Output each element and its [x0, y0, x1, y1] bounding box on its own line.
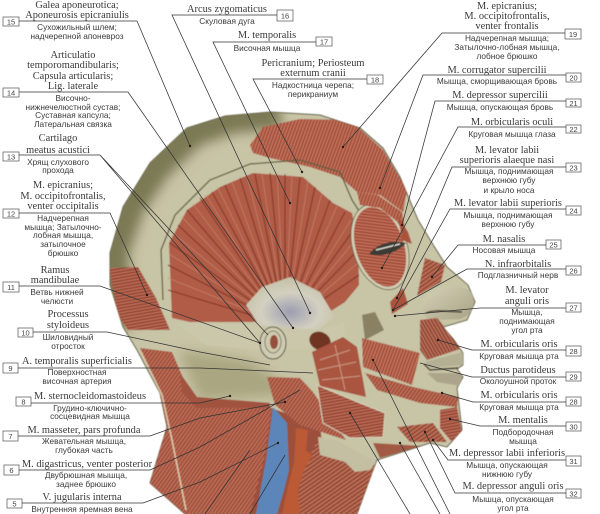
upper lip	[425, 352, 463, 368]
label 13: cartilage of the auditory meatus: 13	[7, 152, 15, 162]
galea shading	[112, 112, 280, 330]
label 26: infraorbital nerve: N. infraorbitalis	[485, 259, 551, 270]
label 20: corrugator: M. corrugator supercilii	[448, 65, 547, 76]
label 18: pericranium	[253, 58, 383, 173]
label 5: internal jugular vein: Внутренняя яремная вена	[31, 504, 133, 514]
label 17: temporalis: Височная мышца	[234, 43, 301, 53]
label 16: zygomatic arch: Скуловая дуга	[199, 16, 255, 26]
label 23: levator labii superioris alaeque nasi: Мышца, поднимающая	[465, 166, 553, 176]
label 24: levator labii superioris	[392, 198, 581, 311]
cavity under cheek	[362, 312, 384, 340]
label 24: levator labii superioris: 24	[569, 206, 578, 216]
label 26: infraorbital nerve: Подглазничный нерв	[478, 270, 559, 280]
label 20: corrugator: 20	[569, 74, 578, 82]
label 11: ramus mandibulae: Ветвь нижней	[30, 287, 84, 297]
label 22: orbicularis oculi: M. orbicularis oculi	[471, 117, 553, 128]
label 13: cartilage of the auditory meatus: Хрящ слухового	[27, 157, 89, 167]
neck muscles left	[140, 348, 272, 514]
label 27: levator anguli oris	[394, 285, 581, 335]
label 7: deep masseter: глубокая часть	[55, 445, 113, 455]
depressor supercilii	[398, 216, 412, 244]
label 11: ramus mandibulae: Ramus	[41, 265, 69, 276]
label 10: styloid process: отросток	[51, 341, 85, 351]
label 31: depressor labii inferioris	[432, 439, 581, 479]
label 14: temporomandibular joint: Височно-	[55, 93, 91, 103]
superficial masseter	[317, 385, 385, 438]
label 21: depressor supercilii: 21	[569, 99, 578, 108]
label 27: levator anguli oris: поднимающая	[499, 316, 555, 326]
label 31: depressor labii inferioris: Мышца, опускающая	[466, 460, 548, 470]
label 25: nasalis: M. nasalis	[483, 234, 525, 245]
label 10: styloid process	[18, 309, 270, 365]
label 11: ramus mandibulae	[3, 265, 260, 343]
label 9: superficial temporal artery: 9	[8, 364, 13, 373]
label 6: digastric posterior belly	[4, 390, 300, 489]
label 28: orbicularis oris lower	[441, 390, 581, 412]
label 9: superficial temporal artery	[3, 356, 313, 386]
label 12: occipital belly: затылочное	[40, 239, 86, 249]
label 26: infraorbital nerve	[393, 259, 581, 310]
label 14: temporomandibular joint	[3, 50, 294, 329]
neck muscles right	[295, 440, 376, 514]
label 7: deep masseter: M. masseter, pars profunda	[28, 425, 141, 436]
mouth	[424, 364, 458, 370]
label 8: sternocleidomastoid	[16, 391, 231, 421]
label 9: superficial temporal artery: Поверхностная	[47, 367, 107, 377]
label 17: temporalis	[213, 30, 332, 204]
label 19: frontal belly	[342, 1, 581, 148]
label 15: galea aponeurotica: Galea aponeurotica;	[35, 0, 119, 11]
label 28: orbicularis oris lower: M. orbicularis oris	[480, 390, 558, 401]
label 23: levator labii superioris alaeque nasi: верхнюю губу	[483, 175, 536, 185]
label 21: depressor supercilii: Мышца, опускающая бровь	[447, 102, 553, 112]
label 32: depressor anguli oris: Мышца, опускающая	[472, 494, 554, 504]
label 31: depressor labii inferioris: M. depressor labii inferioris	[449, 448, 565, 459]
occipital belly	[109, 267, 170, 330]
label 16: zygomatic arch	[172, 4, 311, 314]
label 13: cartilage of the auditory meatus: meatus acustici	[26, 145, 90, 156]
label 32: depressor anguli oris: угол рта	[497, 503, 529, 513]
label 18: pericranium: Pericranium; Periosteum	[261, 58, 365, 69]
label 9: superficial temporal artery: A. temporalis superficialis	[22, 356, 132, 367]
label 17: temporalis: M. temporalis	[238, 30, 296, 41]
label 10: styloid process: Шиловидный	[43, 332, 94, 342]
label 22: orbicularis oculi: 22	[569, 125, 578, 134]
label 25: nasalis: Носовая мышца	[473, 245, 536, 255]
label 31: depressor labii inferioris: нижнюю губу	[482, 469, 533, 479]
orbicularis oculi	[353, 206, 407, 288]
label 11: ramus mandibulae: 11	[7, 283, 15, 292]
label 19: frontal belly: 19	[569, 30, 577, 39]
label 32: depressor anguli oris: M. depressor anguli oris	[462, 481, 564, 492]
temporal tendon	[246, 277, 335, 335]
label 19: frontal belly: venter frontalis	[475, 21, 539, 32]
mastoid shading	[178, 350, 300, 400]
label 20: corrugator	[379, 65, 581, 189]
frontal belly	[250, 119, 407, 212]
label 7: deep masseter: 7	[8, 432, 13, 441]
label 11: ramus mandibulae: челюсти	[41, 296, 74, 306]
levator labii	[390, 288, 408, 314]
ear cartilage	[260, 327, 286, 359]
label 25: nasalis: 25	[549, 240, 558, 250]
label 6: digastric posterior belly: M. digastricus, venter posterior	[22, 459, 153, 470]
label 14: temporomandibular joint: Lig. laterale	[48, 81, 98, 92]
skull and face base	[110, 112, 475, 514]
label 21: depressor supercilii: M. depressor supercilii	[452, 90, 548, 101]
label 12: occipital belly: M. epicranius;	[33, 180, 93, 191]
label 9: superficial temporal artery: височная артерия	[42, 376, 112, 386]
label 23: levator labii superioris alaeque nasi: M. levator labii	[475, 145, 539, 156]
label 6: digastric posterior belly: Двубрюшная мышца,	[45, 470, 127, 480]
label 23: levator labii superioris alaeque nasi: и крыло носа	[484, 185, 535, 195]
label 13: cartilage of the auditory meatus: прохода	[42, 165, 74, 175]
label 23: levator labii superioris alaeque nasi: superioris alaeque nasi	[460, 155, 554, 166]
label 12: occipital belly: M. occipitofrontalis,	[20, 191, 106, 202]
label 19: frontal belly: лобное брюшко	[476, 51, 538, 61]
neck backdrop	[250, 408, 322, 514]
label 22: orbicularis oculi: Круговая мышца глаза	[468, 129, 556, 139]
label 22: orbicularis oculi	[381, 117, 581, 269]
label 29: parotid duct	[420, 363, 581, 386]
label 18: pericranium: 18	[371, 76, 379, 84]
leader lines running off the bottom edge	[205, 359, 450, 514]
label 20: corrugator: Мышца, сморщивающая бровь	[437, 76, 557, 86]
orbit rim	[350, 205, 410, 291]
label 19: frontal belly: M. epicranius;	[477, 1, 537, 12]
orbicularis oris upper	[420, 318, 463, 360]
label 8: sternocleidomastoid: M. sternocleidomastoideus	[34, 391, 146, 402]
label 24: levator labii superioris: M. levator labii superioris	[454, 198, 562, 209]
label 25: nasalis	[431, 234, 561, 278]
label 8: sternocleidomastoid: Грудино-ключично-	[53, 403, 127, 413]
label 14: temporomandibular joint: temporomandibularis;	[27, 60, 119, 71]
label 32: depressor anguli oris: 32	[569, 490, 578, 498]
parotid gland	[312, 337, 366, 397]
label 10: styloid process: styloideus	[47, 320, 89, 331]
label 19: frontal belly: M. occipitofrontalis,	[464, 11, 550, 22]
zygomatic arch	[260, 325, 316, 334]
cheek muscles	[362, 338, 420, 385]
label 23: levator labii superioris alaeque nasi	[396, 145, 581, 299]
depressor anguli oris	[397, 423, 447, 442]
label 6: digastric posterior belly: заднее брюшко	[56, 479, 116, 489]
label 27: levator anguli oris: anguli oris	[505, 296, 549, 307]
internal jugular vein	[256, 407, 289, 514]
label 27: levator anguli oris: Мышца,	[511, 307, 543, 317]
label 12: occipital belly	[3, 180, 148, 296]
label 18: pericranium: Надкостница черепа;	[272, 80, 354, 90]
label 14: temporomandibular joint: Суставная капсула;	[35, 110, 111, 120]
label 15: galea aponeurotica: Aponeurosis epicraniulis	[25, 10, 129, 21]
neck tendon strip	[141, 352, 186, 510]
label 30: mentalis: 30	[569, 422, 578, 432]
label 7: deep masseter: Жевательная мышца,	[42, 436, 126, 446]
label 29: parotid duct: 29	[569, 372, 578, 382]
label 13: cartilage of the auditory meatus: Cartilago	[39, 133, 77, 144]
label 7: deep masseter	[3, 401, 286, 455]
label 23: levator labii superioris alaeque nasi: 23	[569, 164, 578, 172]
label 18: pericranium: externum cranii	[280, 68, 346, 79]
label 10: styloid process: 10	[21, 328, 30, 338]
label 28: orbicularis oris upper: Круговая мышца рта	[479, 351, 559, 361]
label 14: temporomandibular joint: 14	[7, 88, 15, 98]
eye	[369, 242, 406, 255]
label 30: mentalis: мышца	[509, 436, 537, 446]
label 30: mentalis: M. mentalis	[498, 415, 548, 426]
temporalis	[169, 173, 359, 322]
nasalis	[417, 258, 445, 296]
label 28: orbicularis oris upper: 28	[569, 347, 578, 356]
label 30: mentalis	[449, 415, 581, 446]
label 12: occipital belly: 12	[7, 210, 15, 218]
corrugator	[357, 192, 405, 228]
label 21: depressor supercilii	[401, 90, 581, 226]
label 24: levator labii superioris: Мышца, поднимающая	[464, 210, 552, 220]
label 13: cartilage of the auditory meatus	[3, 133, 268, 344]
label 12: occipital belly: Надчерепная	[37, 213, 89, 223]
label 27: levator anguli oris: 27	[569, 304, 578, 312]
label 12: occipital belly: брюшко	[48, 248, 79, 258]
submental muscle	[372, 442, 420, 458]
label 27: levator anguli oris: угол рта	[511, 325, 543, 335]
label 14: temporomandibular joint: Capsula articularis;	[33, 71, 113, 82]
label 19: frontal belly: Затылочно-лобная мышца,	[454, 42, 560, 52]
label 12: occipital belly: мышца; Затылочно-	[24, 222, 102, 232]
label 28: orbicularis oris upper	[437, 339, 581, 361]
label 10: styloid process: Processus	[48, 309, 88, 320]
label 18: pericranium: перикраниум	[288, 89, 338, 99]
label 31: depressor labii inferioris: 31	[569, 457, 578, 466]
label 15: galea aponeurotica: Сухожильный шлем;	[37, 22, 117, 32]
label 19: frontal belly: Надчерепная мышца;	[465, 33, 549, 43]
label 12: occipital belly: venter occipitalis	[27, 201, 99, 212]
label 5: internal jugular vein	[7, 442, 279, 514]
label 16: zygomatic arch: 16	[281, 12, 289, 20]
label 5: internal jugular vein: 5	[12, 500, 17, 508]
label 27: levator anguli oris: M. levator	[505, 285, 549, 296]
label 30: mentalis: Подбородочная	[493, 427, 553, 437]
label 8: sternocleidomastoid: 8	[21, 398, 26, 406]
label 32: depressor anguli oris	[424, 431, 581, 513]
label 14: temporomandibular joint: нижнечелюстной сустав;	[26, 102, 120, 112]
label 29: parotid duct: Околоушной проток	[480, 376, 557, 386]
deep masseter	[267, 377, 346, 440]
label 29: parotid duct: Ductus parotideus	[480, 365, 556, 376]
label 15: galea aponeurotica: 15	[7, 18, 15, 26]
head and neck illustration	[109, 112, 475, 514]
nose	[426, 290, 474, 320]
label 15: galea aponeurotica	[3, 0, 191, 147]
lower cheek muscles	[365, 373, 458, 407]
label 8: sternocleidomastoid: сосцевидная мышца	[50, 411, 130, 421]
label 28: orbicularis oris lower: 28	[569, 398, 578, 406]
temporal line	[161, 160, 368, 300]
carotid artery	[282, 428, 312, 514]
label 26: infraorbital nerve: 26	[569, 266, 578, 276]
label 28: orbicularis oris upper: M. orbicularis oris	[480, 339, 558, 350]
lower lip	[427, 373, 463, 386]
label 11: ramus mandibulae: mandibulae	[31, 275, 80, 286]
mandibular notch	[308, 331, 332, 350]
label 5: internal jugular vein: V. jugularis interna	[42, 492, 122, 503]
label 16: zygomatic arch: Arcus zygomaticus	[187, 4, 267, 15]
label 15: galea aponeurotica: надчерепной апоневроз	[30, 31, 124, 41]
mentalis	[440, 407, 462, 442]
label 14: temporomandibular joint: Латеральная связка	[34, 119, 112, 129]
label 14: temporomandibular joint: Articulatio	[50, 50, 96, 61]
label 24: levator labii superioris: верхнюю губу	[482, 219, 535, 229]
label 6: digastric posterior belly: 6	[9, 466, 14, 475]
sternocleidomastoid cut	[180, 373, 270, 408]
hyoid fascia	[318, 437, 376, 472]
label 12: occipital belly: лобная мышца,	[33, 230, 93, 240]
label 28: orbicularis oris lower: Круговая мышца рта	[479, 402, 559, 412]
label 17: temporalis: 17	[320, 38, 328, 46]
